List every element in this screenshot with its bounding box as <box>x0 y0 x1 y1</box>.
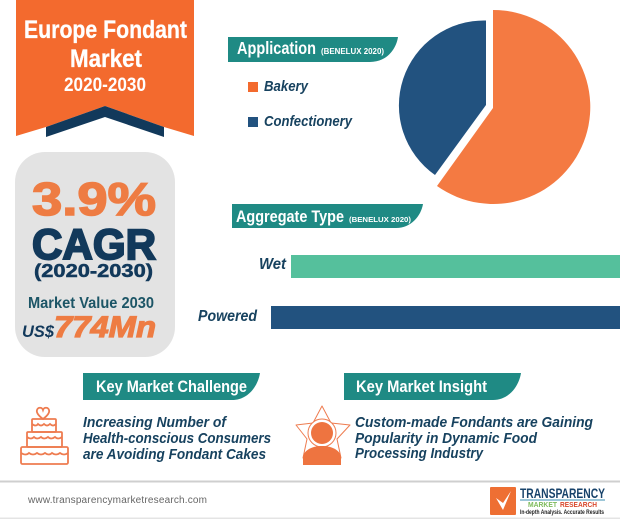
heading tab: key market challenge <box>83 373 260 400</box>
heading tab: application: Application <box>237 38 316 58</box>
legend: confectionery: Confectionery <box>264 113 353 130</box>
bar: powered: Powered <box>198 308 258 325</box>
heading tab: aggregate type: (BENELUX 2020) <box>349 215 412 224</box>
title banner: 2020-2030 <box>64 75 146 96</box>
title banner: Europe Fondant <box>24 16 188 44</box>
heading tab: key market challenge: Key Market Challenge <box>96 377 247 396</box>
text: challenge description: Health-conscious Consumers <box>83 430 271 447</box>
panel: CAGR and market value: Market Value 2030 <box>28 295 154 312</box>
heading tab: key market insight <box>344 373 521 400</box>
bar: wet <box>259 255 620 278</box>
icon: cake <box>21 408 68 464</box>
panel: CAGR and market value: CAGR <box>32 221 156 269</box>
icon: star with person <box>296 406 350 465</box>
heading tab: aggregate type <box>232 204 423 228</box>
heading tab: aggregate type: Aggregate Type <box>236 207 344 226</box>
footer url: www.transparencymarketresearch.com <box>27 495 207 506</box>
logo: MARKET <box>528 500 557 509</box>
legend: bakery: Bakery <box>264 78 309 95</box>
text: insight description: Popularity in Dynamic Food <box>355 430 538 447</box>
bar: wet: Wet <box>259 256 287 273</box>
title banner: Market <box>70 45 143 73</box>
logo: RESEARCH <box>560 500 597 509</box>
logo <box>490 485 605 516</box>
title banner <box>16 0 194 137</box>
text: challenge description: are Avoiding Fondant Cakes <box>83 446 266 463</box>
text: challenge description: Increasing Number of <box>83 414 228 431</box>
text: insight description: Processing Industry <box>355 445 484 462</box>
panel: CAGR and market value: US$ <box>22 322 55 341</box>
text: insight description <box>355 414 593 462</box>
panel: CAGR and market value: (2020-2030) <box>34 261 153 281</box>
bar: powered <box>198 306 620 329</box>
text: insight description: Custom-made Fondants are Gaining <box>355 414 593 431</box>
panel: CAGR and market value <box>15 152 175 357</box>
text: challenge description <box>83 414 271 463</box>
legend: bakery <box>248 78 309 95</box>
heading tab: key market insight: Key Market Insight <box>356 377 487 396</box>
heading tab: application <box>228 37 398 62</box>
panel: CAGR and market value: 3.9% <box>32 173 156 225</box>
panel: CAGR and market value: 774Mn <box>54 311 156 344</box>
pie chart <box>399 10 590 204</box>
heading tab: application: (BENELUX 2020) <box>321 47 384 56</box>
